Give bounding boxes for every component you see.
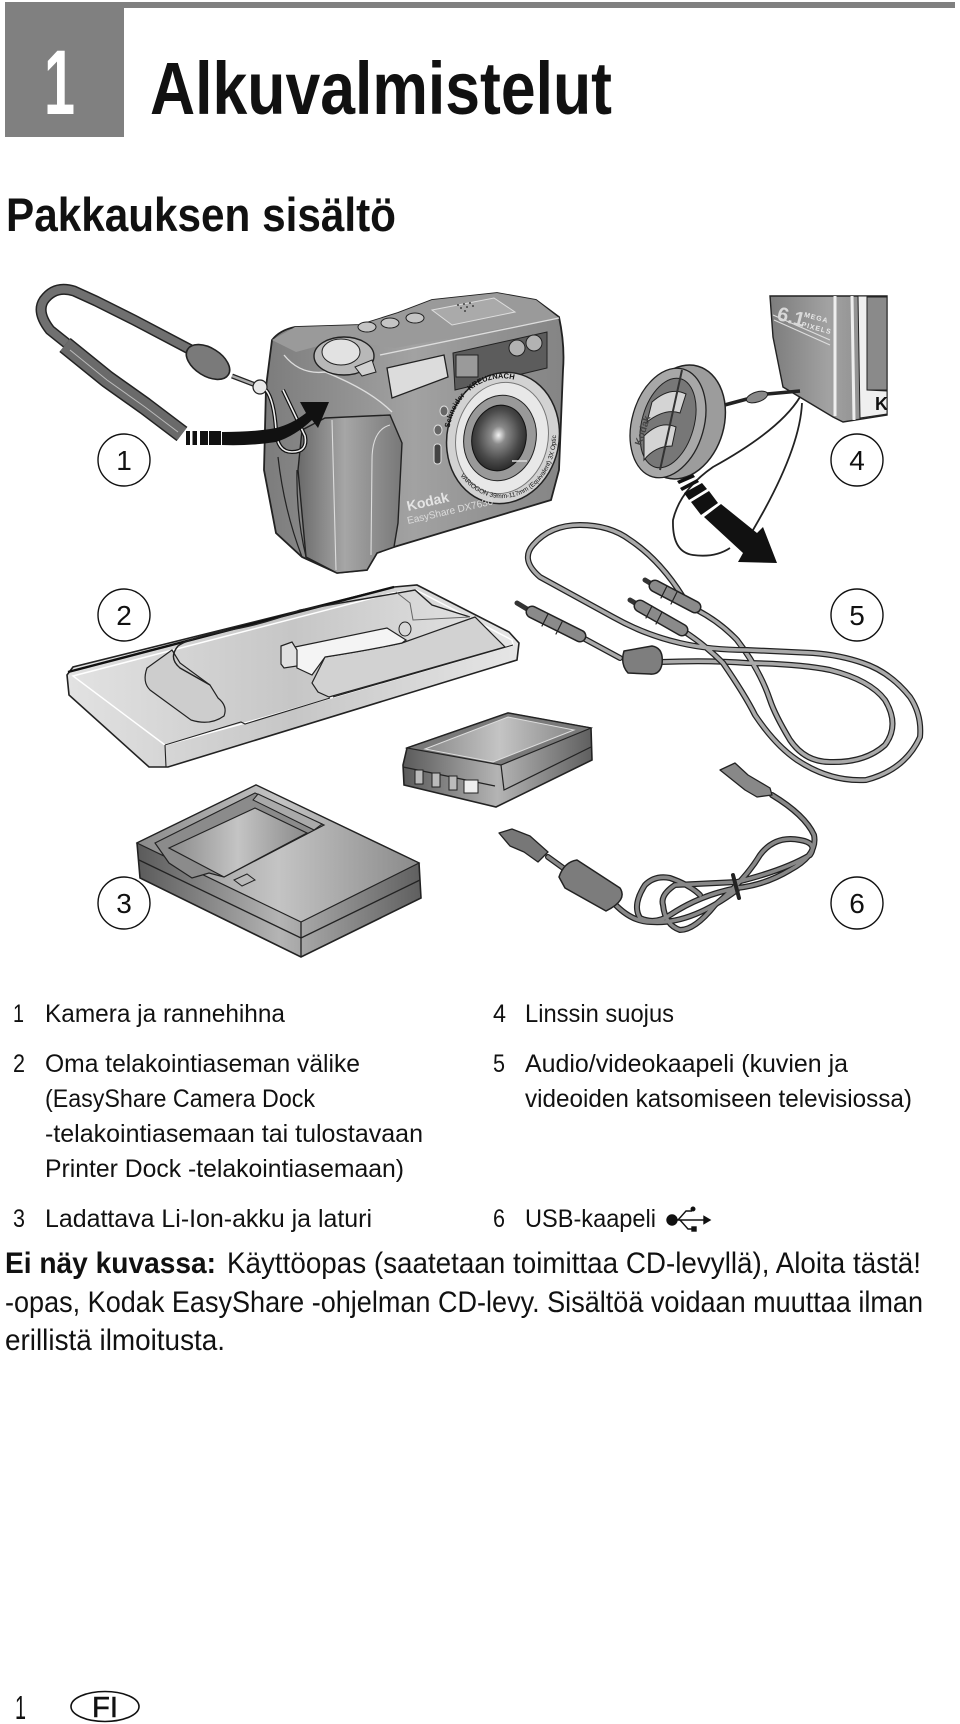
list item 3: Ladattava Li-Ion-akku ja laturi: [45, 1205, 372, 1233]
illustration: USB cable: [499, 763, 814, 930]
chapter header bar: [5, 2, 955, 137]
callout 5: [831, 589, 883, 641]
list item 5: [493, 1050, 912, 1113]
dark window panel: [453, 332, 547, 390]
top surface: [73, 590, 513, 745]
list item 2: 2: [13, 1050, 25, 1078]
USB ferrite: [559, 860, 622, 911]
language badge FI: FI: [92, 1692, 118, 1724]
strap loop through lug: [253, 380, 305, 452]
camera top plate: [272, 293, 559, 352]
language badge FI: [71, 1692, 139, 1724]
megapixel label: 6.1: [775, 303, 807, 332]
camera branding: EasyShare DX7630: [406, 496, 495, 527]
list item 5: videoiden katsomiseen televisiossa): [525, 1085, 912, 1113]
camera body: [264, 293, 564, 573]
illustration: camera: [252, 292, 564, 574]
heading: package contents: Pakkauksen sisältö: [6, 188, 396, 241]
list item 4: 4: [493, 1000, 506, 1028]
list item 4: Linssin suojus: [525, 1000, 674, 1028]
mini plug: [499, 829, 548, 862]
lens cap: [626, 355, 738, 489]
right raised shape: [312, 617, 505, 697]
callout 4: [831, 434, 883, 486]
list item 5: Audio/videokaapeli (kuvien ja: [525, 1050, 848, 1078]
small indicators: [440, 406, 448, 416]
ferrite: [623, 646, 662, 674]
list item 5: 5: [493, 1050, 505, 1078]
list item 2: -telakointiasemaan tai tulostavaan: [45, 1120, 423, 1148]
connector pin: [281, 642, 297, 668]
illustration: dock insert: [67, 585, 519, 767]
illustration: battery: [403, 713, 592, 807]
list item 6: USB-kaapeli: [525, 1205, 656, 1233]
speaker dots: [457, 302, 474, 312]
battery contacts: [415, 770, 478, 793]
megapixel label: PIXELS: [801, 322, 832, 336]
front edge seam: [165, 645, 513, 767]
callout 3: [98, 877, 150, 929]
camera branding: Kodak: [405, 489, 451, 514]
list item 2: Oma telakointiaseman välike: [45, 1050, 360, 1078]
lens: [444, 372, 560, 504]
callout 1: 1: [116, 445, 132, 476]
shutter button: [314, 337, 374, 375]
callout 2: [98, 589, 150, 641]
callout 3: 3: [116, 888, 132, 919]
flash: [387, 355, 448, 398]
list item 1: 1: [13, 1000, 24, 1028]
cradle outline: [173, 590, 470, 685]
callout 2: 2: [116, 600, 132, 631]
front highlight lines: [284, 318, 559, 412]
illustration: audio/video cable: [517, 525, 920, 780]
arrow: cap removal: [677, 474, 777, 563]
megapixel label: MEGA: [803, 312, 829, 325]
lens: Schneider · KREUZNACH: [444, 373, 515, 428]
icon: USB symbol: [667, 1207, 710, 1231]
callout 4: 4: [849, 445, 865, 476]
left raised shape: [145, 650, 225, 722]
lens: VARIOGON 39mm-117mm (Equivalent) 3X Optical: [461, 435, 557, 498]
list item 2: (EasyShare Camera Dock: [45, 1085, 315, 1113]
illustration: charger: [137, 785, 421, 957]
megapixel label: [775, 303, 835, 339]
callout 6: [831, 877, 883, 929]
clipped brand text: Ko: [875, 394, 899, 414]
USB A plug: [720, 763, 772, 797]
illustration: lens cap and camera corner: Kodak: [633, 414, 653, 447]
camera grip: [298, 415, 402, 573]
note: items not shown: Ei näy kuvassa:: [5, 1247, 216, 1280]
slot: [295, 628, 406, 675]
RCA and jack plugs: [517, 580, 655, 612]
callout 5: 5: [849, 600, 865, 631]
note: items not shown: [5, 1247, 923, 1357]
list item 6: 6: [493, 1205, 505, 1233]
note: items not shown: erillistä ilmoitusta.: [5, 1324, 225, 1357]
illustration: lens cap and camera corner: [618, 296, 899, 556]
charger recess: [155, 793, 324, 878]
list item 2: [13, 1050, 423, 1183]
note: items not shown: Käyttöopas (saatetaan toimittaa CD-levyllä), Aloita tästä!: [227, 1247, 921, 1280]
cap tether loops: [673, 397, 802, 556]
illustration: wrist strap: [41, 289, 258, 434]
list item 2: Printer Dock -telakointiasemaan): [45, 1155, 404, 1183]
callout 1: [98, 434, 150, 486]
top buttons: [358, 313, 424, 332]
list item 3: 3: [13, 1205, 25, 1233]
cap cord and bead: [706, 389, 800, 410]
callout 6: 6: [849, 888, 865, 919]
camera corner: [770, 296, 887, 422]
chapter number: 1: [44, 32, 75, 134]
list item 1: Kamera ja rannehihna: [45, 1000, 285, 1028]
arrow: strap attaches to camera: [186, 402, 329, 445]
title: Alkuvalmistelut: [150, 47, 612, 130]
